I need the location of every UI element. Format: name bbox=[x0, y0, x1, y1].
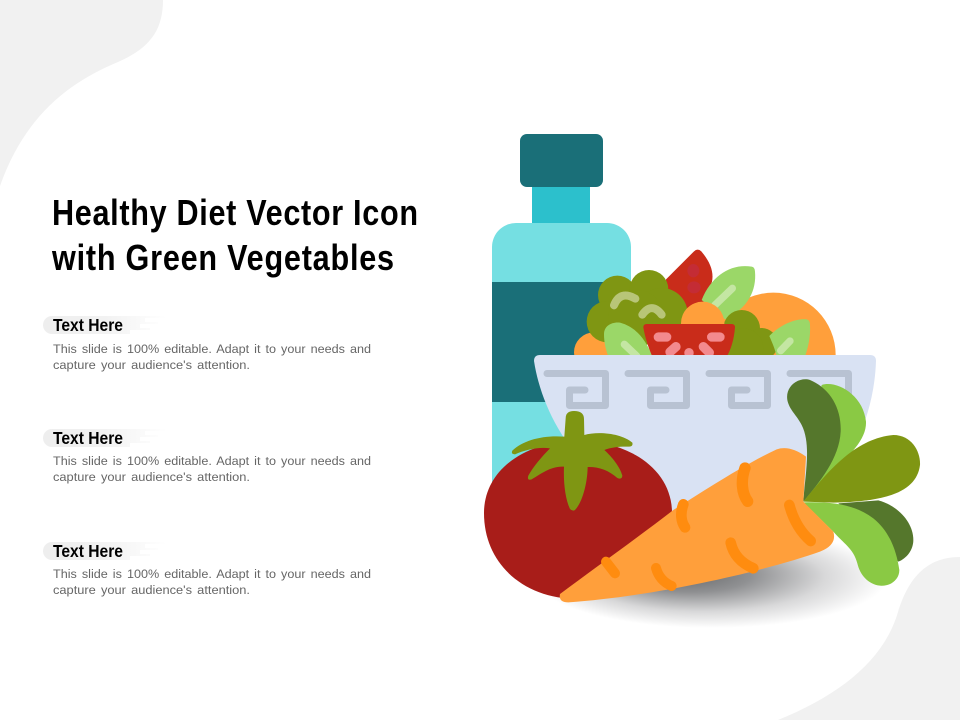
broccoli left bbox=[587, 270, 688, 347]
text block 2 bbox=[43, 428, 371, 484]
text block 1: This slide is 100% editable. Adapt it to your needs and bbox=[53, 342, 371, 356]
title: with Green Vegetables bbox=[51, 239, 394, 279]
illustration: healthy food bbox=[484, 134, 920, 628]
leaf right bbox=[769, 319, 810, 357]
text block 2: Text Here bbox=[53, 428, 123, 448]
text block 3 bbox=[43, 541, 371, 597]
text block 2: This slide is 100% editable. Adapt it to your needs and bbox=[53, 454, 371, 468]
carrot marks bbox=[606, 468, 811, 586]
text block 2: capture your audience's attention. bbox=[53, 470, 250, 484]
red pepper bbox=[666, 250, 713, 317]
text block 1: Text Here bbox=[53, 315, 123, 335]
icon: bottle bbox=[492, 134, 631, 500]
orange piece bbox=[681, 302, 724, 345]
icon: tomato bbox=[484, 411, 672, 599]
heading highlight 1 bbox=[43, 316, 167, 334]
ground shadow bbox=[536, 528, 888, 628]
background blob: bottom right bbox=[778, 557, 960, 720]
tomato stem bbox=[512, 411, 633, 511]
text block 1 bbox=[43, 315, 371, 372]
background blob: top left bbox=[0, 0, 163, 186]
bowl pattern bbox=[547, 374, 848, 406]
orange slices bbox=[574, 293, 836, 417]
text block 3: This slide is 100% editable. Adapt it to your needs and bbox=[53, 567, 371, 581]
heading highlight 3 bbox=[43, 542, 167, 560]
icon: carrot bbox=[560, 379, 920, 602]
tomato slice bbox=[643, 324, 735, 357]
leaf left bbox=[604, 323, 653, 357]
text block 3: Text Here bbox=[53, 541, 123, 561]
title: Healthy Diet Vector Icon bbox=[52, 194, 418, 234]
title bbox=[51, 194, 418, 279]
text block 3: capture your audience's attention. bbox=[53, 583, 250, 597]
broccoli right bbox=[723, 310, 778, 368]
leaf top bbox=[702, 266, 755, 319]
salad in bowl bbox=[574, 250, 836, 417]
carrot body bbox=[560, 448, 834, 602]
icon: bowl bbox=[534, 355, 876, 545]
broccoli highlights bbox=[614, 296, 662, 315]
carrot leaves bbox=[787, 379, 920, 586]
heading highlight 2 bbox=[43, 429, 167, 447]
text block 1: capture your audience's attention. bbox=[53, 358, 250, 372]
